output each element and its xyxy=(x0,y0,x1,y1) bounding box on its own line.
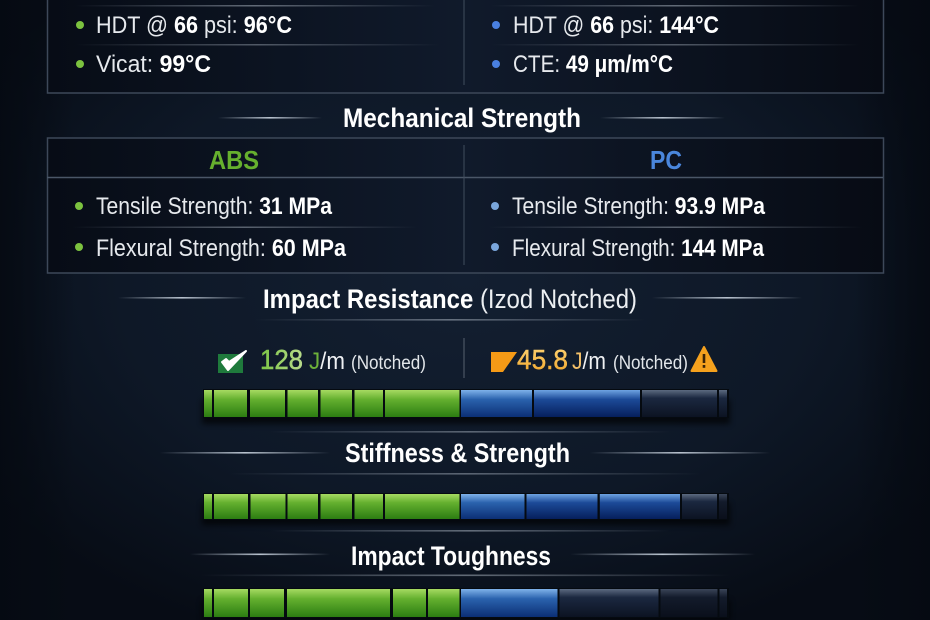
panel: thermal properties xyxy=(48,0,884,93)
heading: Impact Resistance: Impact Resistance (Izod Notched) xyxy=(263,284,637,314)
bar: impact toughness xyxy=(202,588,730,620)
ABS impact value: J/m xyxy=(309,348,345,375)
ABS impact value: (Notched) xyxy=(351,353,426,374)
PC impact value: 45.8 xyxy=(517,344,568,375)
icon: orange flag xyxy=(491,352,517,372)
PC impact value xyxy=(517,344,688,375)
icon: warning triangle xyxy=(692,347,716,371)
PC thermal rows: HDT @ 66 psi: 144°C xyxy=(513,12,719,39)
ABS impact value: 128 xyxy=(260,344,303,375)
ABS column: Flexural Strength: 60 MPa xyxy=(96,235,347,262)
icon: check mark xyxy=(218,351,246,373)
panel: mechanical strength xyxy=(47,138,884,273)
ABS thermal rows: HDT @ 66 psi: 96°C xyxy=(96,12,292,39)
PC impact value: (Notched) xyxy=(613,353,688,374)
PC column: Tensile Strength: 93.9 MPa xyxy=(512,193,766,220)
PC column: Flexural Strength: 144 MPa xyxy=(512,235,765,262)
PC thermal rows xyxy=(492,12,719,78)
bar: stiffness and strength xyxy=(202,493,730,525)
impact values row xyxy=(218,338,716,378)
PC column xyxy=(491,145,766,262)
heading: Mechanical Strength: Mechanical Strength xyxy=(343,103,581,133)
PC column: PC xyxy=(650,145,682,175)
PC impact value: J/m xyxy=(572,348,606,375)
ABS thermal rows: Vicat: 99°C xyxy=(96,51,211,78)
ABS column xyxy=(75,145,347,262)
ABS thermal rows xyxy=(76,12,292,78)
ABS column: Tensile Strength: 31 MPa xyxy=(96,193,333,220)
PC thermal rows: CTE: 49 μm/m°C xyxy=(513,51,673,78)
heading: Impact Toughness: Impact Toughness xyxy=(351,541,551,571)
bar: impact resistance xyxy=(202,389,730,424)
ABS column: ABS xyxy=(209,145,259,175)
ABS impact value xyxy=(260,344,426,375)
heading: Stiffness & Strength: Stiffness & Strength xyxy=(345,438,570,468)
